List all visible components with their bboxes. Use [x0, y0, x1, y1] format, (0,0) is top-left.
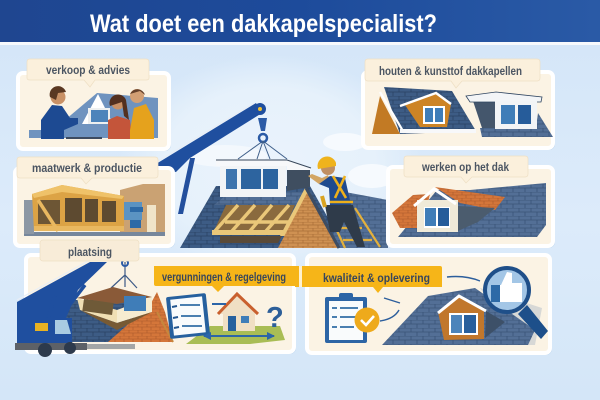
label: kwaliteit & oplevering: kwaliteit & oplevering: [323, 273, 430, 285]
panel: kwaliteit & oplevering: [295, 255, 552, 355]
label: verkoop & advies: verkoop & advies: [46, 65, 130, 77]
panel: houten & kunststof dakkapellen: [363, 59, 555, 150]
illustration: permits clipboard and house: [166, 293, 285, 344]
dormer on hook: [216, 160, 311, 197]
label: kwaliteit & oplevering: [295, 266, 442, 293]
panel: plaatsing: [15, 240, 300, 357]
label: maatwerk & productie: [17, 157, 158, 184]
worker: [308, 157, 380, 248]
label: werken op het dak: [404, 156, 528, 183]
header banner: [0, 0, 600, 45]
label: plaatsing: [40, 240, 139, 261]
illustration: advisor with couple: [29, 86, 158, 139]
label: vergunningen & regelgeving: vergunningen & regelgeving: [162, 272, 286, 284]
label: houten & kunststof dakkapellen: houten & kunsttof dakkapellen: [379, 66, 522, 78]
illustration: timber dormer and workshop: [24, 184, 165, 236]
illustration: wood dormer: [372, 87, 476, 134]
roof: [180, 186, 345, 248]
title: Wat doet een dakkapelspecialist?: [90, 10, 437, 38]
ladder: [332, 208, 380, 248]
illustration: permits clipboard and house: ?: [266, 302, 284, 334]
label: vergunningen & regelgeving: [154, 266, 300, 292]
label: verkoop & advies: [27, 59, 149, 87]
label: houten & kunststof dakkapellen: [365, 59, 540, 88]
timber frame: [212, 188, 309, 243]
label: werken op het dak: werken op het dak: [421, 162, 510, 174]
brick gable: [278, 193, 339, 248]
illustration: crane truck and dormer: [15, 260, 173, 357]
crane arm: [156, 103, 287, 214]
central scene: crane and roof: [156, 103, 396, 248]
panel: werken op het dak: [388, 156, 555, 248]
panel: verkoop & advies: [18, 59, 171, 151]
illustration: plastic dormer: [466, 92, 553, 137]
label: maatwerk & productie: maatwerk & productie: [32, 163, 142, 175]
label: plaatsing: plaatsing: [68, 247, 112, 259]
illustration: dormer on roof with magnifier: [382, 268, 548, 345]
panel: maatwerk & productie: [15, 157, 175, 248]
illustration: dormer on slate roof: [392, 183, 546, 237]
illustration: clipboard with check: [325, 276, 480, 343]
